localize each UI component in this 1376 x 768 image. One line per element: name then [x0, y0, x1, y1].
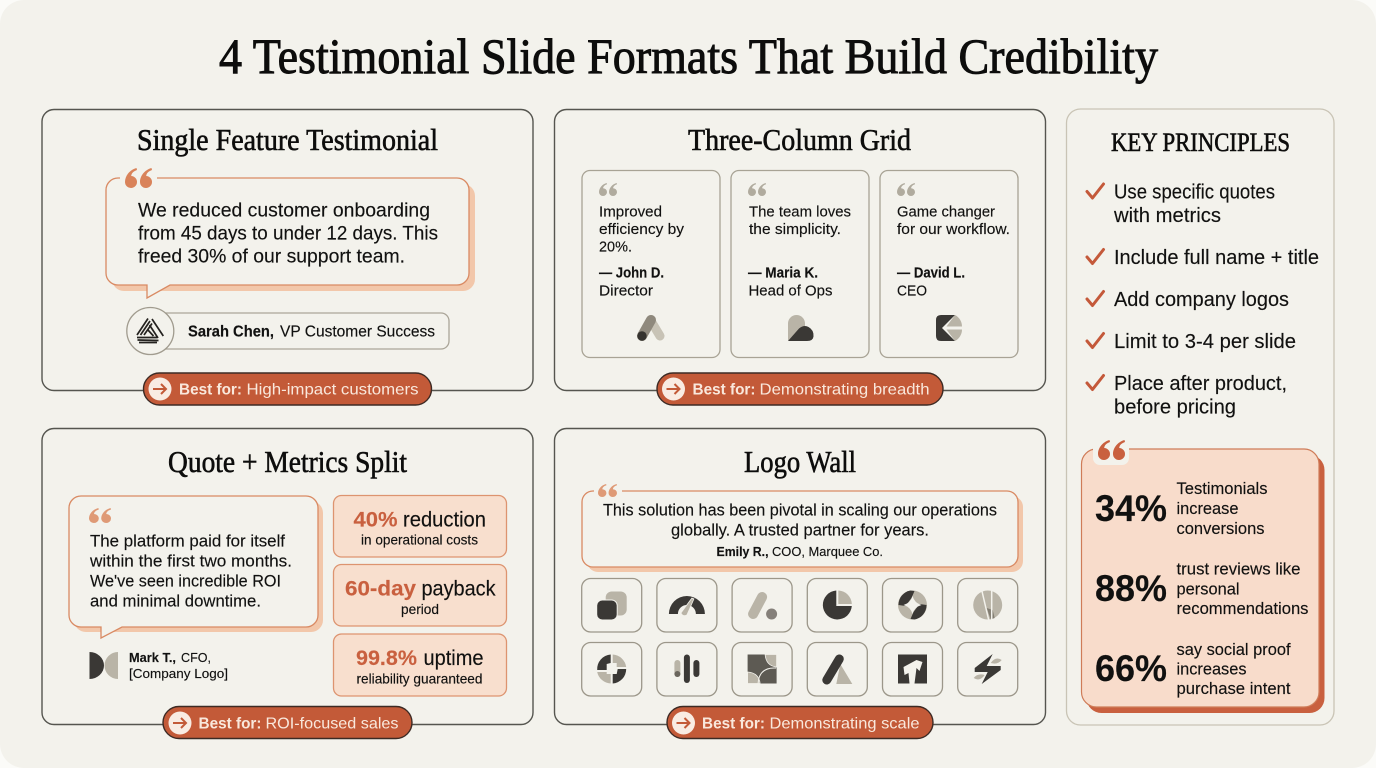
icon: logo heart [788, 315, 814, 341]
title: 4 Testimonial Slide Formats That Build Credibility [219, 28, 1158, 84]
metric: 60-day payback: 60-day [345, 578, 416, 600]
speech bubble: quote: The platform paid for itself [90, 532, 285, 551]
heading: single feature testimonial: Single Feature Testimonial [137, 122, 438, 157]
stat: 34%: increase [1176, 500, 1238, 518]
logo tile 2 [657, 578, 717, 632]
best for pill: Demonstrating scale [770, 716, 920, 732]
card: Maria K.: The team loves [749, 205, 851, 221]
stat: 88% [1095, 560, 1308, 618]
principle: full name: Include full name + title [1114, 246, 1319, 269]
speech bubble: quote: and minimal downtime. [90, 592, 261, 610]
attribution: Sarah Chen [127, 308, 449, 354]
speech bubble: quote [582, 484, 1023, 572]
card: Maria K.: — Maria K. [748, 266, 818, 282]
card: David L.: for our workflow. [897, 222, 1010, 238]
panel: three-column grid [554, 110, 1046, 405]
best for pill [163, 706, 412, 738]
metric: 40% reduction [334, 496, 506, 557]
panel: key principles [1066, 109, 1334, 725]
stat: 34% [1095, 480, 1268, 538]
speech bubble: quote: globally. A trusted partner for years. [671, 522, 929, 540]
speech bubble: quote [69, 496, 323, 638]
metric: 99.8% uptime: uptime [424, 647, 484, 670]
principle: placement: before pricing [1114, 396, 1236, 418]
principle: specific quotes: Use specific quotes [1114, 180, 1275, 204]
attribution: Sarah Chen: Sarah Chen, [188, 324, 274, 340]
speech bubble: quote: This solution has been pivotal in scaling our operations [603, 502, 997, 520]
metric: 40% reduction: 40% [354, 508, 398, 532]
attribution: Mark T.: CFO, [181, 650, 211, 665]
icon: quote mark [598, 484, 617, 497]
principle: placement: Place after product, [1114, 372, 1287, 395]
heading: three-column grid: Three-Column Grid [688, 122, 911, 157]
card: David L.: Game changer [897, 205, 995, 221]
card: David L.: — David L. [897, 266, 965, 282]
attribution: Mark T. [90, 650, 228, 681]
best for pill: High-impact customers [246, 382, 418, 398]
best for pill [657, 373, 943, 405]
stat: 34%: conversions [1176, 520, 1264, 538]
metric: 99.8% uptime [334, 634, 506, 696]
heading: key principles: KEY PRINCIPLES [1111, 128, 1290, 157]
best for pill [144, 373, 432, 405]
icon: logo A [637, 320, 660, 341]
icon: quote mark [599, 183, 617, 196]
logo tile 11 [882, 642, 942, 696]
card: Maria K.: Head of Ops [748, 284, 832, 300]
metric: 99.8% uptime: reliability guaranteed [356, 670, 482, 686]
card: David L. [880, 170, 1018, 358]
panel: logo wall [554, 428, 1046, 738]
stat: 88%: 88% [1095, 567, 1167, 609]
icon: quote mark [89, 508, 111, 523]
icon: quote mark [748, 183, 766, 196]
stat: 88%: trust reviews like [1176, 560, 1300, 578]
card: John D.: — John D. [599, 266, 664, 282]
metric: 99.8% uptime: 99.8% [356, 647, 417, 670]
stat: 66%: say social proof [1176, 641, 1291, 659]
metric: 40% reduction: in operational costs [361, 532, 478, 548]
logo tile 5 [882, 578, 942, 632]
stat: 34%: 34% [1095, 487, 1167, 529]
panel: quote + metrics split [42, 428, 533, 738]
icon: logo C [936, 315, 962, 341]
speech bubble: quote: We reduced customer onboarding [138, 200, 430, 222]
metric: 60-day payback: period [401, 601, 439, 617]
stat: 66% [1095, 641, 1291, 698]
metric: 60-day payback [334, 564, 506, 626]
card: Maria K. [731, 170, 869, 358]
logo tile 4 [807, 578, 867, 632]
logo tile 12 [958, 642, 1018, 696]
attribution: Mark T.: [Company Logo] [129, 666, 228, 681]
attribution: Sarah Chen: VP Customer Success [280, 324, 435, 340]
best for pill: Demonstrating breadth [760, 382, 930, 398]
best for pill: Best for: [198, 716, 262, 732]
logo tile 10 [807, 642, 867, 696]
best for pill [667, 706, 933, 738]
card: John D.: Improved [599, 205, 662, 221]
stat: 88%: personal [1176, 580, 1240, 598]
stat: 34%: Testimonials [1176, 480, 1268, 498]
stat: 66%: increases [1176, 660, 1246, 678]
heading: quote + metrics split: Quote + Metrics Split [168, 444, 407, 479]
principle: specific quotes [1087, 180, 1275, 227]
principle: logos: Add company logos [1114, 288, 1289, 311]
speech bubble: quote: from 45 days to under 12 days. This [138, 222, 438, 244]
speech bubble: quote: COO, Marquee Co. [772, 544, 883, 559]
logo tile 6 [958, 578, 1018, 632]
panel: single feature testimonial [42, 110, 533, 405]
speech bubble: quote [106, 168, 475, 298]
speech bubble: quote: We've seen incredible ROI [90, 572, 281, 590]
card: John D. [582, 170, 720, 358]
card: John D.: Director [599, 284, 653, 300]
icon: quote mark [897, 183, 915, 196]
logo tile 3 [732, 578, 792, 632]
stats box [1082, 438, 1324, 713]
card: John D.: 20%. [599, 240, 632, 256]
speech bubble: quote: Emily R., [716, 544, 768, 559]
icon: quote mark [1093, 438, 1129, 465]
principle: placement [1087, 372, 1287, 418]
icon: quote mark [125, 168, 152, 188]
metric: 60-day payback: payback [422, 578, 496, 600]
stat: 66%: 66% [1095, 647, 1167, 689]
logo tile 7 [582, 642, 642, 696]
principle: specific quotes: with metrics [1113, 204, 1221, 227]
logo tile 8 [657, 642, 717, 696]
stat: 66%: purchase intent [1176, 680, 1291, 698]
best for pill: ROI-focused sales [266, 716, 398, 732]
best for pill: Best for: [692, 382, 756, 398]
metric: 40% reduction: reduction [403, 508, 486, 532]
logo tile 1 [582, 578, 642, 632]
best for pill: Best for: [179, 382, 242, 398]
heading: logo wall: Logo Wall [744, 444, 856, 479]
best for pill: Best for: [702, 716, 765, 732]
attribution: Mark T.: Mark T., [129, 650, 176, 665]
stat: 88%: recommendations [1176, 600, 1308, 618]
card: Maria K.: the simplicity. [749, 222, 841, 238]
speech bubble: quote: within the first two months. [89, 552, 292, 570]
card: David L.: CEO [897, 284, 927, 300]
logo tile 9 [732, 642, 792, 696]
icon: striped triangle logo [127, 308, 174, 354]
icon: logo D [90, 652, 118, 679]
speech bubble: quote: freed 30% of our support team. [138, 246, 405, 268]
principle: limit: Limit to 3-4 per slide [1114, 330, 1296, 353]
card: John D.: efficiency by [599, 222, 685, 238]
